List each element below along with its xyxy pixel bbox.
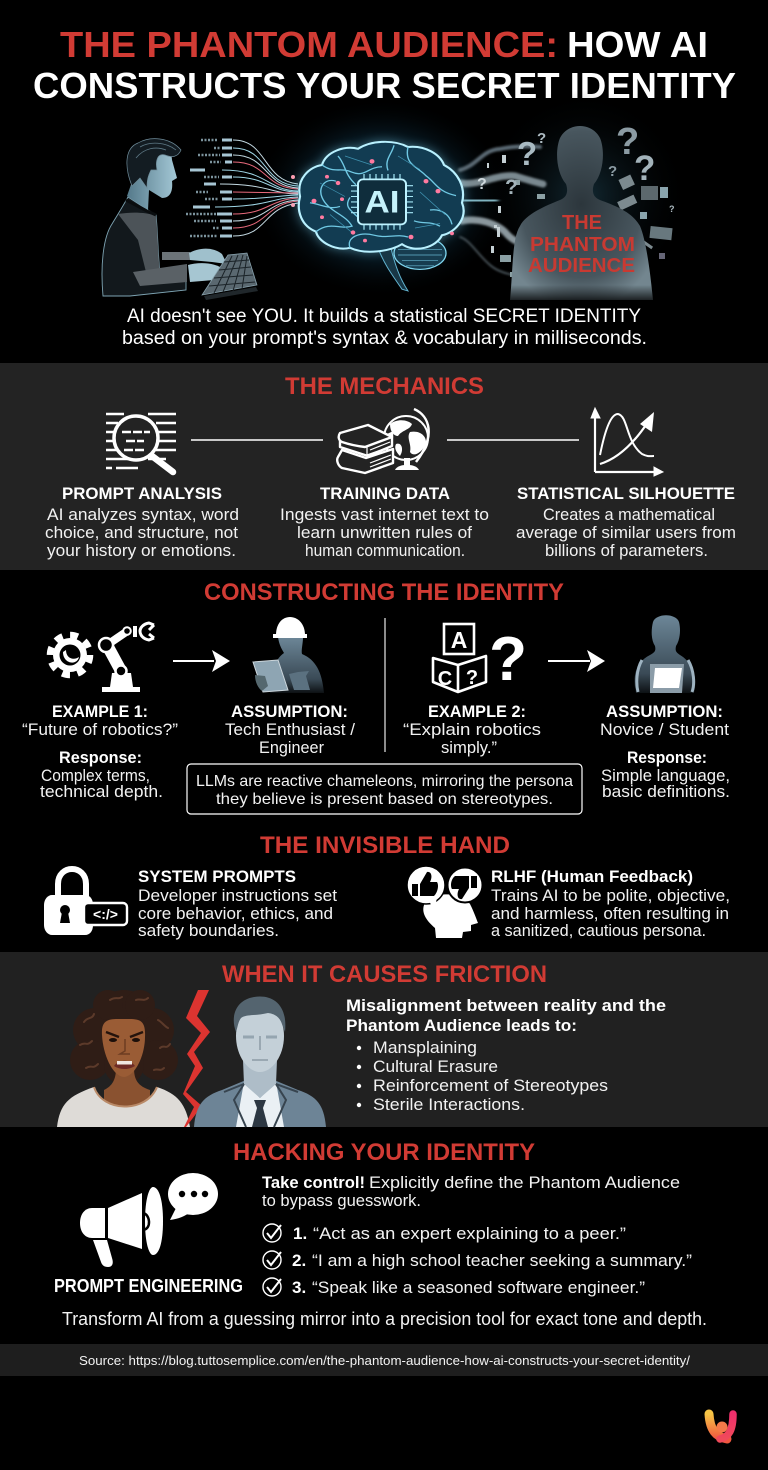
- question marks: ?: [505, 176, 518, 199]
- title: [33, 24, 736, 106]
- divider: [384, 618, 386, 752]
- label: prompt engineering: PROMPT ENGINEERING: [54, 1276, 243, 1296]
- text: take control: [262, 1173, 680, 1210]
- icon: head with thumbs up and down: [407, 866, 482, 938]
- check item 1: 1.: [293, 1224, 307, 1243]
- question marks: ?: [616, 121, 639, 163]
- heading: the mechanics: THE MECHANICS: [285, 373, 484, 400]
- column: rlhf: [491, 867, 730, 940]
- example 1: Complex terms,: [41, 766, 150, 785]
- data fragments to silhouette: [460, 146, 673, 277]
- arrow: [548, 650, 605, 672]
- question marks: ?: [537, 130, 546, 147]
- example 2: [403, 702, 541, 757]
- check item 2: “I am a high school teacher seeking a summary.”: [312, 1251, 692, 1270]
- intro text: based on your prompt's syntax & vocabulary in milliseconds.: [122, 328, 647, 349]
- column: prompt analysis: PROMPT ANALYSIS: [62, 484, 222, 503]
- column: training data: human communication.: [305, 541, 465, 560]
- callout: reactive chameleons: they believe is present based on stereotypes.: [216, 791, 553, 808]
- callout: reactive chameleons: LLMs are reactive chameleons, mirroring the persona: [196, 773, 573, 790]
- data stream into brain: [186, 140, 312, 236]
- heading: the invisible hand: THE INVISIBLE HAND: [260, 832, 510, 859]
- column: rlhf: and harmless, often resulting in: [491, 904, 729, 923]
- icon: alphabet blocks and question mark: ?: [466, 667, 478, 689]
- column: system prompts: safety boundaries.: [138, 921, 279, 940]
- assumption 2: Simple language,: [601, 766, 730, 785]
- question marks: ?: [669, 204, 674, 214]
- title: CONSTRUCTS YOUR SECRET IDENTITY: [33, 65, 736, 106]
- heading: constructing the identity: CONSTRUCTING THE IDENTITY: [204, 579, 564, 606]
- brain halo: [252, 98, 512, 298]
- column: rlhf: RLHF (Human Feedback): [491, 867, 693, 886]
- example 2: EXAMPLE 2:: [428, 702, 526, 721]
- text: misalignment list: Misalignment between reality and the: [346, 996, 666, 1015]
- arrow: [173, 650, 230, 672]
- silhouette label: [528, 212, 635, 277]
- panel: when it causes friction: [0, 952, 768, 1127]
- assumption 2: [600, 702, 730, 801]
- column: training data: Ingests vast internet text to: [280, 505, 489, 524]
- assumption 1: Engineer: [259, 738, 324, 757]
- example 2: “Explain robotics: [403, 720, 541, 739]
- silhouette label: AUDIENCE: [528, 255, 635, 277]
- example 1: Response:: [59, 748, 142, 767]
- icon: padlock with code tag: <:/>: [93, 906, 118, 922]
- connector line: [447, 439, 579, 441]
- column: statistical silhouette: [516, 484, 736, 560]
- column: training data: learn unwritten rules of: [297, 523, 472, 542]
- text: misalignment list: Reinforcement of Stereotypes: [373, 1076, 608, 1095]
- panel: constructing the identity: [22, 579, 730, 814]
- column: statistical silhouette: STATISTICAL SILHOUETTE: [517, 484, 735, 503]
- icon: alphabet blocks and question mark: ?: [489, 625, 527, 694]
- example 1: [22, 702, 178, 801]
- illustration: blank phantom man: [194, 996, 326, 1127]
- question marks: ?: [608, 163, 617, 180]
- title: HOW AI: [567, 24, 708, 65]
- column: rlhf: Trains AI to be polite, objective,: [491, 886, 730, 905]
- check item 1: “Act as an expert explaining to a peer.”: [313, 1224, 626, 1243]
- question marks: ?: [517, 135, 537, 172]
- text: take control: Take control!: [262, 1173, 365, 1192]
- AI chip: AI: [365, 185, 399, 220]
- silhouette halo: [480, 90, 690, 300]
- icon: red lightning divider: [183, 990, 210, 1127]
- column: prompt analysis: [45, 484, 239, 560]
- column: training data: [280, 484, 489, 560]
- callout: reactive chameleons: [187, 764, 582, 814]
- silhouette label: THE: [562, 212, 602, 234]
- user at keyboard: [102, 139, 258, 300]
- assumption 1: ASSUMPTION:: [231, 702, 348, 721]
- example 1: EXAMPLE 1:: [52, 702, 148, 721]
- forearms and hands: [162, 252, 190, 260]
- heading: hacking your identity: HACKING YOUR IDENTITY: [233, 1139, 535, 1166]
- assumption 2: ASSUMPTION:: [606, 702, 723, 721]
- column: system prompts: Developer instructions set: [138, 886, 337, 905]
- example 2: simply.”: [441, 738, 497, 757]
- heading: when it causes friction: WHEN IT CAUSES FRICTION: [222, 961, 547, 988]
- question marks: [477, 121, 674, 214]
- column: statistical silhouette: average of similar users from: [516, 523, 736, 542]
- face and neck: [127, 144, 177, 210]
- AI chip: [351, 174, 413, 230]
- question marks: ?: [634, 149, 655, 188]
- intro text: [122, 306, 647, 349]
- column: system prompts: [138, 867, 337, 940]
- column: prompt analysis: your history or emotions.: [47, 541, 236, 560]
- icon: books and globe: [337, 409, 429, 473]
- intro text: AI doesn't see YOU. It builds a statistical SECRET IDENTITY: [127, 306, 641, 327]
- icon: padlock with code tag: [44, 869, 127, 935]
- column: prompt analysis: AI analyzes syntax, word: [47, 505, 239, 524]
- text: misalignment list: Cultural Erasure: [373, 1057, 498, 1076]
- torso: [102, 197, 186, 296]
- assumption 2: Response:: [627, 748, 707, 767]
- panel: the invisible hand: [44, 832, 730, 940]
- keyboard: [202, 253, 257, 295]
- checklist: [263, 1224, 692, 1297]
- phantom audience silhouette: [477, 121, 674, 300]
- column: system prompts: core behavior, ethics, and: [138, 904, 333, 923]
- icon: gear and robot arm: [50, 623, 154, 692]
- column: statistical silhouette: billions of parameters.: [545, 541, 708, 560]
- source bar: [0, 1344, 768, 1376]
- question marks: ?: [477, 176, 487, 193]
- logo: [709, 1414, 733, 1439]
- column: system prompts: SYSTEM PROMPTS: [138, 867, 296, 886]
- icon: alphabet blocks and question mark: [433, 624, 527, 694]
- column: prompt analysis: choice, and structure, not: [45, 523, 238, 542]
- column: training data: TRAINING DATA: [320, 484, 450, 503]
- icon: statistical chart: [591, 408, 663, 476]
- check item 3: 3.: [292, 1278, 306, 1297]
- assumption 2: Novice / Student: [600, 720, 729, 739]
- illustration: frustrated woman: [57, 990, 190, 1127]
- icon: megaphone with speech bubble: [80, 1173, 218, 1267]
- assumption 1: [225, 702, 355, 757]
- icon: alphabet blocks and question mark: A: [451, 627, 467, 653]
- text: misalignment list: [346, 996, 666, 1114]
- text: take control: to bypass guesswork.: [262, 1191, 421, 1210]
- assumption 2: basic definitions.: [602, 782, 730, 801]
- text: take control: Explicitly define the Phantom Audience: [369, 1173, 680, 1192]
- icon: student with book: [635, 615, 695, 693]
- hair: [127, 139, 181, 188]
- column: rlhf: a sanitized, cautious persona.: [491, 921, 706, 940]
- panel: header: [33, 24, 736, 349]
- icon: alphabet blocks and question mark: C: [438, 668, 452, 690]
- text: misalignment list: Mansplaining: [373, 1038, 477, 1057]
- connector line: [191, 439, 323, 441]
- silhouette label: PHANTOM: [530, 234, 635, 256]
- text: misalignment list: Sterile Interactions.: [373, 1095, 525, 1114]
- source bar: Source: https://blog.tuttosemplice.com/en/the-phantom-audience-how-ai-constructs-your-secret-identity/: [79, 1354, 691, 1368]
- column: statistical silhouette: Creates a mathematical: [543, 505, 715, 524]
- icon: magnifier over text: [106, 414, 176, 472]
- closing statement: Transform AI from a guessing mirror into a precision tool for exact tone and depth.: [62, 1309, 707, 1329]
- example 1: technical depth.: [40, 782, 163, 801]
- example 1: “Future of robotics?”: [22, 720, 178, 739]
- assumption 1: Tech Enthusiast /: [225, 720, 355, 739]
- text: misalignment list: Phantom Audience leads to:: [346, 1016, 577, 1035]
- check item 3: “Speak like a seasoned software engineer.”: [312, 1278, 645, 1297]
- glowing brain with AI chip: [299, 142, 464, 291]
- panel: the mechanics: [0, 363, 768, 570]
- panel: hacking your identity: [54, 1139, 707, 1329]
- data text bars: [186, 140, 232, 236]
- hero illustration: [102, 90, 690, 300]
- title: THE PHANTOM AUDIENCE:: [60, 24, 558, 65]
- icon: engineer with tablet: [253, 617, 324, 693]
- check item 2: 2.: [292, 1251, 306, 1270]
